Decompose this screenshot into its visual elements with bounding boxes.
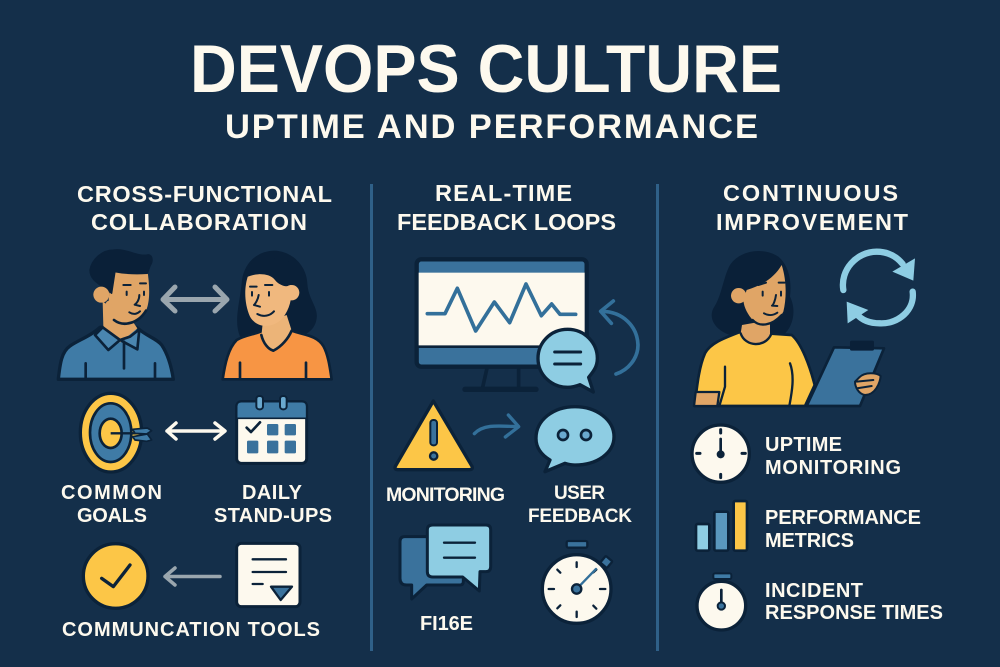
- arrow: curved right: [474, 415, 519, 437]
- label: user feedback: USER: [554, 483, 605, 504]
- label: user feedback: FEEDBACK: [528, 506, 632, 527]
- heading: cross-functional collaboration: [77, 181, 332, 235]
- label: uptime monitoring: [765, 434, 901, 479]
- icon: incident stopwatch: [697, 573, 746, 630]
- label: daily stand-ups: STAND-UPS: [214, 505, 332, 527]
- icon: user feedback bubble: [536, 407, 614, 472]
- arrow: curved feedback: [601, 301, 638, 374]
- icon: bar chart: [696, 501, 747, 551]
- label: common goals: [61, 482, 162, 527]
- heading: real-time feedback loops: REAL-TIME: [435, 180, 572, 206]
- heading: continuous improvement: IMPROVEMENT: [716, 209, 909, 235]
- icon: calendar: [237, 396, 307, 463]
- icon: man in blue shirt: [58, 250, 173, 379]
- icon: clock: [692, 425, 749, 482]
- panel: cross-functional collaboration: [58, 181, 332, 641]
- arrow: two-way grey: [163, 287, 227, 311]
- icon: woman with clipboard: [694, 251, 884, 406]
- heading: real-time feedback loops: FEEDBACK LOOPS: [397, 209, 616, 235]
- icon: overlapping chat bubbles: [400, 525, 491, 599]
- icon: chat bubble with lines: [538, 329, 597, 392]
- label: performance metrics: [765, 507, 921, 552]
- icon: stopwatch: [542, 541, 612, 623]
- title: DEVOPS CULTURE: [190, 31, 782, 107]
- label: daily stand-ups: DAILY: [242, 482, 303, 504]
- label: communication tools: COMMUNCATION TOOLS: [62, 619, 320, 641]
- arrow: left grey: [165, 568, 220, 585]
- label: daily stand-ups: [214, 482, 332, 527]
- arrow: two-way white: [167, 423, 225, 439]
- label: incident response times: [765, 580, 943, 624]
- icon: woman in orange shirt: [223, 251, 332, 379]
- icon: document with pen tip: [237, 543, 300, 607]
- icon: yellow check circle: [83, 544, 148, 608]
- panel: real-time feedback loops: [386, 180, 638, 635]
- label: common goals: GOALS: [77, 505, 147, 527]
- subtitle: UPTIME AND PERFORMANCE: [225, 108, 758, 146]
- label: uptime monitoring: MONITORING: [765, 457, 901, 479]
- label: file: FI16E: [420, 613, 473, 635]
- heading: cross-functional collaboration: COLLABORATION: [91, 209, 307, 235]
- heading: real-time feedback loops: [397, 180, 616, 235]
- icon: warning triangle: [395, 401, 472, 470]
- panel: continuous improvement: [692, 180, 943, 630]
- label: common goals: COMMON: [61, 482, 162, 504]
- label: performance metrics: PERFORMANCE: [765, 507, 921, 529]
- heading: continuous improvement: [716, 180, 909, 235]
- icon: target with dart: [80, 393, 152, 472]
- icon: refresh cycle: [843, 252, 915, 323]
- label: user feedback: [528, 483, 632, 527]
- label: incident response times: RESPONSE TIMES: [765, 602, 943, 624]
- icon: monitor with chart: [417, 259, 587, 389]
- heading: continuous improvement: CONTINUOUS: [723, 180, 898, 206]
- label: incident response times: INCIDENT: [765, 580, 863, 602]
- heading: cross-functional collaboration: CROSS-FUNCTIONAL: [77, 181, 332, 207]
- label: uptime monitoring: UPTIME: [765, 434, 842, 456]
- label: performance metrics: METRICS: [765, 530, 854, 552]
- label: monitoring: MONITORING: [386, 484, 505, 506]
